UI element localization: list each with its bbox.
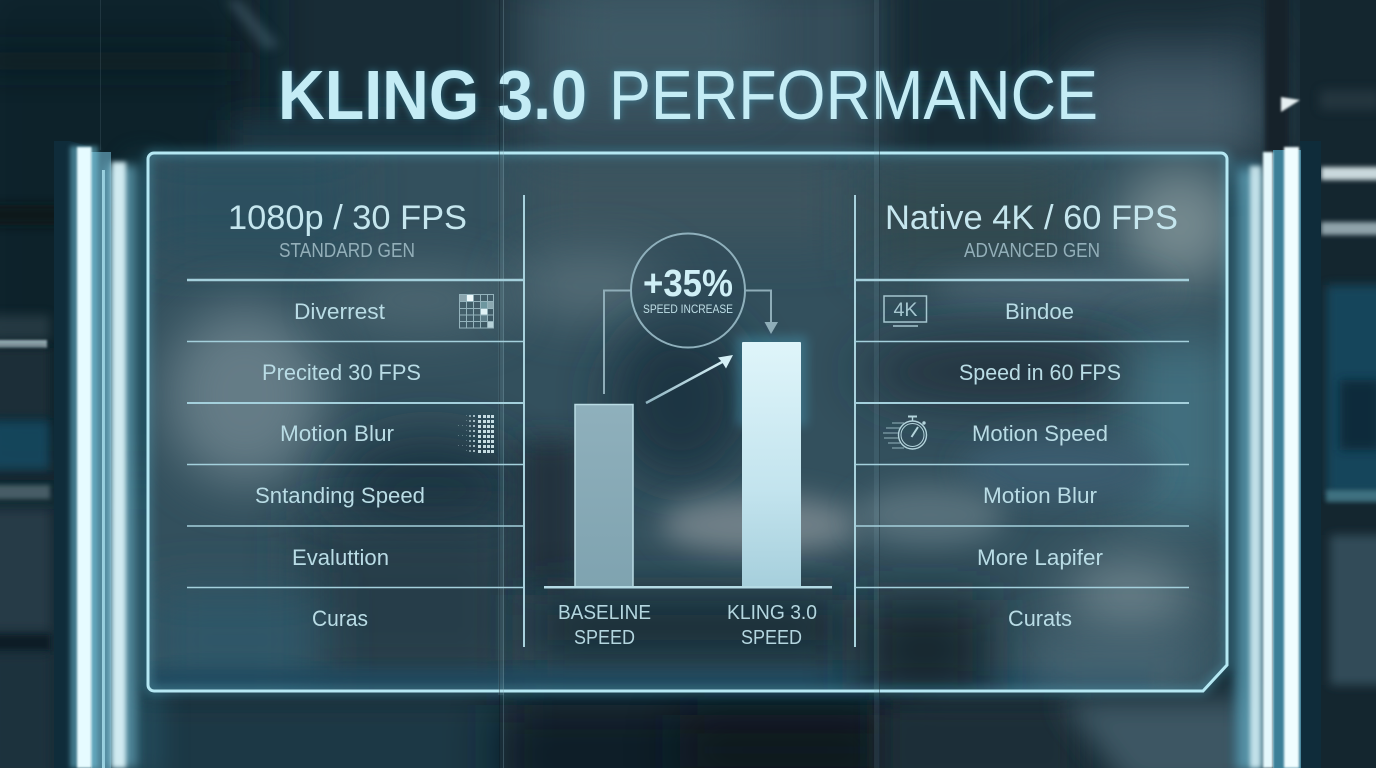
title: KLING 3.0 (278, 56, 587, 134)
left light column (54, 141, 137, 768)
icon: stopwatch (883, 416, 926, 449)
label: kling 3.0 speed (727, 602, 817, 649)
panel: left column standard gen (187, 199, 524, 631)
panel: right column advanced gen (855, 199, 1189, 631)
label: baseline speed: BASELINE (558, 602, 651, 624)
left row labels: Sntanding Speed (255, 483, 425, 508)
right row labels: Curats (1008, 606, 1072, 631)
icon: 4K monitor (884, 296, 926, 326)
left row labels: Motion Blur (280, 421, 394, 446)
title: PERFORMANCE (609, 56, 1098, 134)
left row labels: Evaluttion (292, 545, 389, 570)
badge: +35% speed increase: SPEED INCREASE (643, 302, 733, 316)
badge: +35% speed increase: +35% (643, 263, 733, 305)
label: kling 3.0 speed: KLING 3.0 (727, 602, 817, 624)
growth arrow (646, 355, 733, 403)
right row labels: Speed in 60 FPS (959, 360, 1121, 385)
left subheading: STANDARD GEN (279, 240, 415, 262)
panel: center bar chart (544, 234, 832, 649)
right row dividers (855, 280, 1189, 588)
right row labels: Bindoe (1005, 299, 1074, 324)
left row dividers (187, 280, 524, 588)
bar: baseline speed (575, 404, 633, 587)
badge: +35% speed increase (631, 234, 745, 348)
bar: kling 3.0 speed (736, 336, 807, 587)
left row labels (255, 299, 425, 631)
left row labels: Diverrest (294, 299, 385, 324)
title (278, 56, 1098, 134)
right row labels (959, 299, 1121, 631)
right vertical divider (854, 195, 856, 647)
chart axis (544, 586, 832, 588)
label: baseline speed (558, 602, 651, 649)
right row labels: Motion Blur (983, 483, 1097, 508)
icon: 4K monitor: 4K (894, 300, 918, 321)
label: baseline speed: SPEED (574, 627, 635, 649)
left vertical divider (523, 195, 525, 647)
label: kling 3.0 speed: SPEED (741, 627, 802, 649)
icon: halftone dots (458, 415, 494, 453)
icon: pixel grid (460, 294, 494, 328)
left row labels: Precited 30 FPS (262, 360, 421, 385)
left heading: 1080p / 30 FPS (228, 199, 467, 237)
right row labels: Motion Speed (972, 421, 1108, 446)
panel: glass frame (148, 150, 1240, 700)
left row labels: Curas (312, 606, 368, 631)
right light column (1238, 141, 1321, 768)
connector arrow: baseline to badge to bar (604, 290, 778, 394)
right subheading: ADVANCED GEN (964, 240, 1100, 262)
right heading: Native 4K / 60 FPS (885, 199, 1178, 237)
glass seams (100, 0, 880, 768)
right row labels: More Lapifer (977, 545, 1103, 570)
